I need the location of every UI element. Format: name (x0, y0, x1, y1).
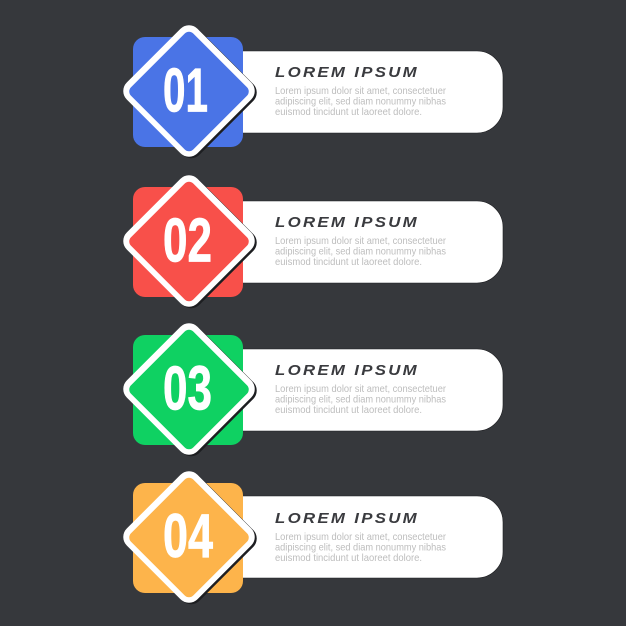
body text 04: euismod tincidunt ut laoreet dolore. (275, 553, 422, 564)
body text 01: Lorem ipsum dolor sit amet, consectetuer (275, 86, 447, 97)
colored square 03 (133, 335, 243, 445)
panel: step 03 (118, 318, 503, 461)
body text 02 (275, 236, 447, 268)
body text 02: Lorem ipsum dolor sit amet, consectetuer (275, 236, 447, 247)
diamond badge 04 (118, 466, 262, 609)
card 03 (240, 349, 503, 431)
number 01: 01 (163, 56, 208, 126)
body text 03 (275, 384, 447, 416)
number 03: 03 (163, 354, 212, 424)
body text 02: adipiscing elit, sed diam nonummy nibhas (275, 246, 446, 258)
number 04: 04 (163, 502, 213, 571)
body text 01 (275, 86, 447, 118)
body text 04 (275, 532, 447, 564)
colored square 02 (133, 187, 243, 297)
panel: step 04 (118, 466, 503, 609)
number 02: 02 (163, 206, 212, 276)
diamond badge 03 (118, 318, 262, 461)
heading 03: LOREM IPSUM (275, 363, 419, 379)
card 01 (240, 51, 503, 133)
heading 01: LOREM IPSUM (275, 65, 419, 81)
body text 04: adipiscing elit, sed diam nonummy nibhas (275, 542, 446, 554)
body text 01: euismod tincidunt ut laoreet dolore. (275, 107, 422, 118)
heading 04: LOREM IPSUM (275, 511, 419, 527)
body text 04: Lorem ipsum dolor sit amet, consectetuer (275, 532, 447, 543)
heading 02: LOREM IPSUM (275, 215, 419, 231)
body text 01: adipiscing elit, sed diam nonummy nibhas (275, 96, 446, 108)
diamond badge 02 (118, 170, 262, 313)
panel: step 01 (118, 20, 503, 163)
body text 03: euismod tincidunt ut laoreet dolore. (275, 405, 422, 416)
colored square 04 (133, 483, 243, 593)
body text 03: adipiscing elit, sed diam nonummy nibhas (275, 394, 446, 406)
colored square 01 (133, 37, 243, 147)
diamond badge 01 (118, 20, 262, 163)
panel: step 02 (118, 170, 503, 313)
card 04 (240, 496, 503, 578)
body text 02: euismod tincidunt ut laoreet dolore. (275, 257, 422, 268)
body text 03: Lorem ipsum dolor sit amet, consectetuer (275, 384, 447, 395)
card 02 (240, 201, 503, 283)
